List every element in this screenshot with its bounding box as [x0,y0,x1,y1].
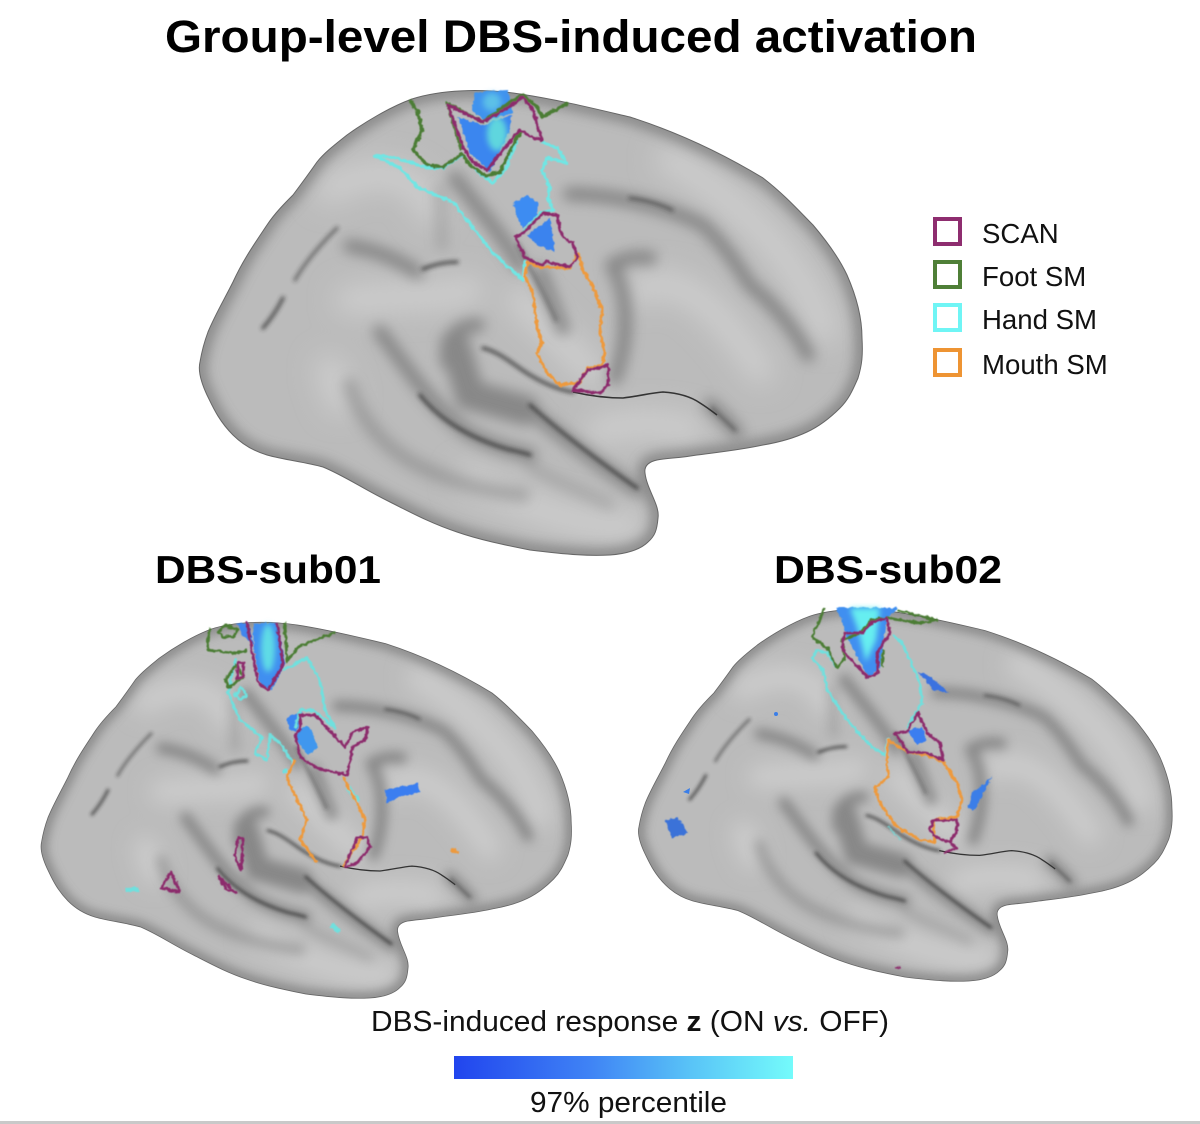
activation: DBS-sub01 [237,623,420,803]
network outlines: DBS-sub01 [126,622,459,932]
Mouth SM outline [875,740,962,842]
Mouth SM outline [287,760,459,867]
legend item: Hand SM: Hand SM [982,304,1097,335]
SCAN outline [842,618,957,968]
colour bar label: 97% percentile [530,1087,727,1119]
Hand SM outline [373,140,567,280]
legend [935,218,1108,380]
heading: DBS-sub02: DBS-sub02 [774,549,1002,592]
network outlines: group-level [373,95,608,393]
Hand SM outline [126,658,358,932]
legend item: SCAN: SCAN [982,218,1059,249]
title: Group-level DBS-induced activation [165,11,977,62]
DBS-sub02 brain surface [638,604,1173,982]
SCAN outline [448,97,608,393]
network outlines: DBS-sub02 [812,608,962,968]
DBS-sub01 brain surface [40,620,572,999]
colour bar [454,1056,793,1079]
activation: group-level [458,90,555,252]
Mouth SM outline [525,253,605,385]
heading: DBS-sub01: DBS-sub01 [155,549,381,592]
colour bar caption: DBS-induced response z (ON vs. OFF) [371,1006,889,1038]
legend item: SCAN [935,218,1059,249]
legend item: Foot SM: Foot SM [982,261,1086,292]
legend item: Foot SM [935,261,1086,292]
group-level brain surface [198,88,863,556]
SCAN outline [161,622,370,892]
activation: DBS-sub02 [665,607,992,838]
Foot SM outline [410,95,568,176]
Hand SM outline [812,635,922,840]
legend item: Mouth SM: Mouth SM [982,349,1108,380]
Foot SM outline [812,608,937,668]
Foot SM outline [207,622,335,688]
